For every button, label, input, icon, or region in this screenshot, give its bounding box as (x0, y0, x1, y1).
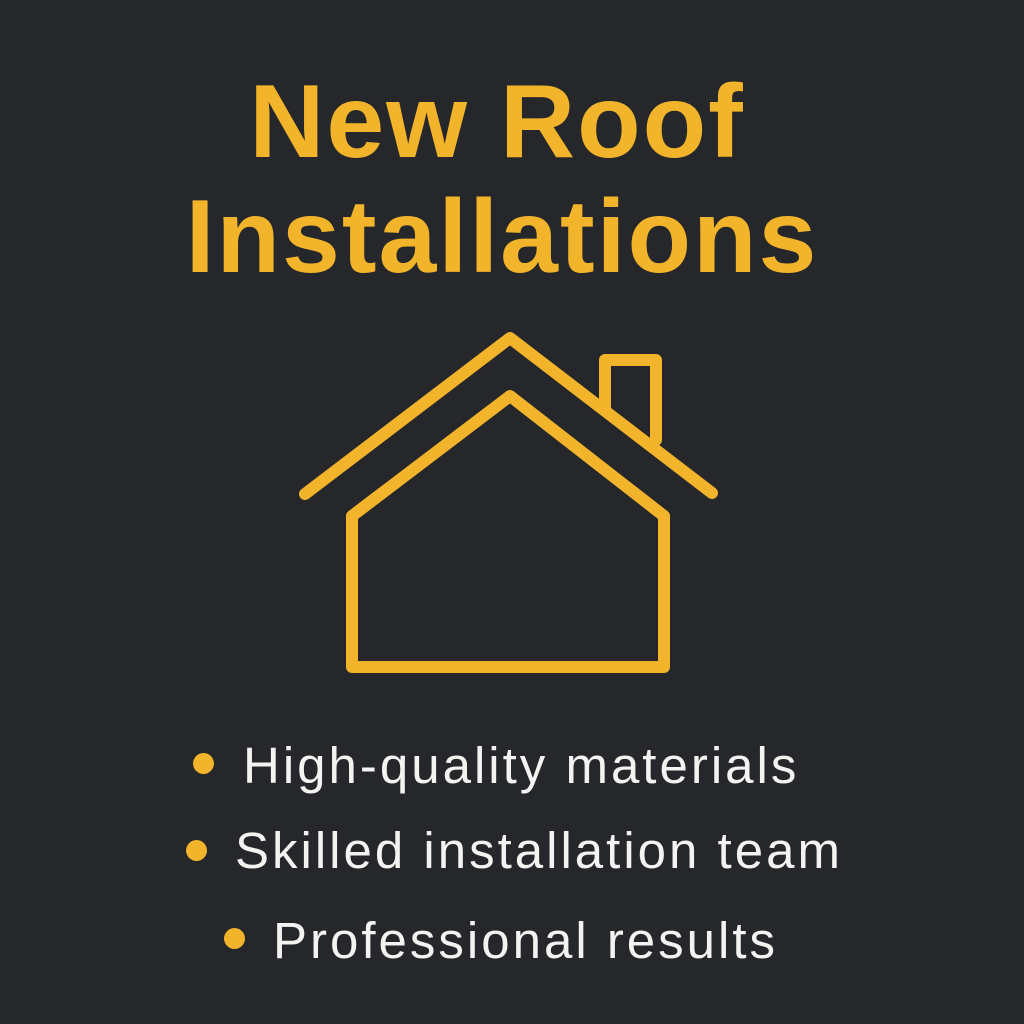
bullet 2 (186, 822, 843, 879)
bullet list (186, 737, 843, 969)
bullet list: Professional results (273, 912, 778, 969)
bullet 3 (224, 912, 778, 969)
bullet 1 (193, 737, 799, 794)
title: New Roof (249, 64, 745, 180)
title: Installations (186, 179, 818, 295)
bullet list: High-quality materials (243, 737, 799, 794)
bullet list: Skilled installation team (235, 822, 843, 879)
title (186, 64, 818, 295)
